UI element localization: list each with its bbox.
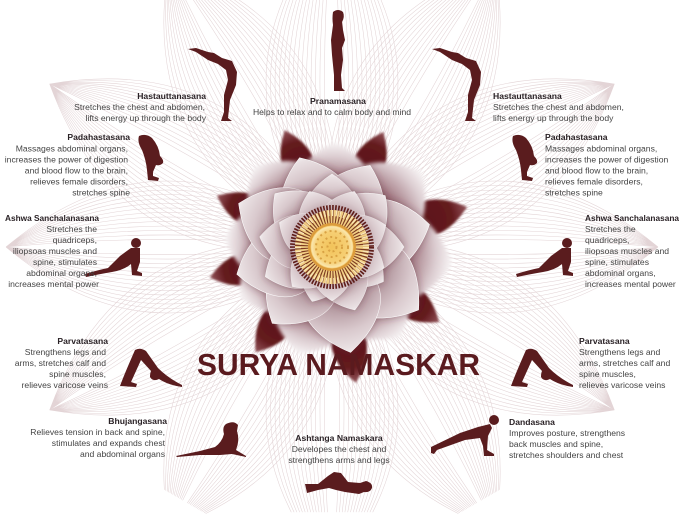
outer petals (220, 136, 458, 367)
text: Parvatasana left: relieves varicose veins (22, 380, 108, 390)
pose: Dandasana (431, 415, 499, 456)
text: Ashwa Sanchalanasana left: abdominal organs, (26, 268, 97, 278)
pose: Ashwa Sanchalanasana right (516, 238, 573, 277)
text: Ashtanga Namaskara: strengthens arms and legs (288, 455, 390, 465)
text: Ashwa Sanchalanasana right: Stretches the (585, 224, 636, 234)
text: Ashwa Sanchalanasana left (5, 213, 99, 289)
text: Padahastasana left: relieves female disorders, (30, 176, 128, 186)
lotus flower (206, 124, 472, 386)
text: Parvatasana left: Strengthens legs and (25, 347, 106, 357)
text: Padahastasana left: Padahastasana (67, 132, 130, 142)
text blocks (5, 91, 679, 465)
text: Padahastasana left: Massages abdominal organs, (16, 144, 128, 154)
text: Dandasana: stretches shoulders and chest (509, 450, 624, 460)
text: Parvatasana right: Parvatasana (579, 336, 630, 346)
text: Padahastasana right (545, 132, 668, 198)
pose: Hastauttanasana left (188, 48, 237, 121)
pose: Ashtanga Namaskara (305, 472, 372, 494)
text: Dandasana: Dandasana (509, 417, 555, 427)
text: Hastauttanasana right: Stretches the chest and abdomen, (493, 102, 624, 112)
text: Ashwa Sanchalanasana left: Ashwa Sanchalanasana (5, 213, 99, 223)
text: Parvatasana right: Strengthens legs and (579, 347, 660, 357)
yoga pose silhouettes (85, 10, 573, 494)
text: Padahastasana right: relieves female disorders, (545, 176, 643, 186)
text: Parvatasana left: spine muscles, (49, 369, 106, 379)
text: Parvatasana left: Parvatasana (57, 336, 108, 346)
text: Ashtanga Namaskara: Ashtanga Namaskara (295, 433, 383, 443)
text: Parvatasana right: relieves varicose veins (579, 380, 665, 390)
text: Parvatasana left (15, 336, 108, 390)
text: Ashtanga Namaskara (288, 433, 390, 465)
text: Ashwa Sanchalanasana right: spine, stimulates (585, 257, 649, 267)
text: Padahastasana left: and blood flow to the brain, (25, 166, 128, 176)
text: Parvatasana right: spine muscles, (579, 369, 636, 379)
text: Hastauttanasana right: lifts energy up through the body (493, 113, 614, 123)
text: Ashwa Sanchalanasana right: quadriceps, (585, 235, 629, 245)
text: Dandasana (509, 417, 625, 460)
text: Hastauttanasana left: lifts energy up through the body (86, 113, 207, 123)
text: Ashwa Sanchalanasana right: abdominal organs, (585, 268, 656, 278)
text: Parvatasana left: arms, stretches calf and (15, 358, 106, 368)
text: Ashwa Sanchalanasana left: Stretches the (46, 224, 97, 234)
text: Hastauttanasana left: Hastauttanasana (137, 91, 206, 101)
text: Pranamasana (253, 96, 411, 117)
text: Bhujangasana: Bhujangasana (108, 416, 167, 426)
text: Parvatasana right: arms, stretches calf and (579, 358, 670, 368)
inner petals (254, 173, 404, 318)
text: Bhujangasana: Relieves tension in back and spine, (30, 427, 165, 437)
text: Dandasana: Improves posture, strengthens (509, 428, 625, 438)
title: SURYA NAMASKAR (197, 347, 480, 382)
text: Ashtanga Namaskara: Developes the chest and (292, 444, 387, 454)
stamens and seed head (292, 208, 372, 286)
pose: Parvatasana right (511, 349, 573, 387)
text: Hastauttanasana right: Hastauttanasana (493, 91, 562, 101)
text: Ashwa Sanchalanasana left: quadriceps, (53, 235, 97, 245)
text: Pranamasana: Helps to relax and to calm body and mind (253, 107, 411, 117)
pose: Padahastasana right (512, 135, 537, 181)
text: Hastauttanasana left (74, 91, 207, 123)
pose: Pranamasana (331, 10, 345, 91)
text: Bhujangasana: stimulates and expands chest (52, 438, 166, 448)
text: Dandasana: back muscles and spine, (509, 439, 603, 449)
innermost petals (270, 183, 394, 301)
text: Padahastasana left: increases the power of digestion (5, 154, 128, 164)
pose: Parvatasana left (120, 349, 182, 387)
text: Padahastasana right: Padahastasana (545, 132, 608, 142)
pose: Padahastasana left (138, 135, 163, 181)
text: Bhujangasana (30, 416, 167, 459)
text: Padahastasana right: stretches spine (545, 188, 603, 198)
middle petals (223, 146, 442, 359)
text: Ashwa Sanchalanasana left: increases mental power (8, 279, 99, 289)
text: Ashwa Sanchalanasana right: increases mental power (585, 279, 676, 289)
pose: Hastauttanasana right (432, 48, 481, 121)
pose: Ashwa Sanchalanasana left (85, 238, 142, 277)
text: Ashwa Sanchalanasana left: spine, stimulates (33, 257, 97, 267)
text: Parvatasana right (579, 336, 670, 390)
text: Padahastasana right: and blood flow to the brain, (545, 166, 648, 176)
text: Hastauttanasana left: Stretches the chest and abdomen, (74, 102, 205, 112)
text: Hastauttanasana right (493, 91, 624, 123)
text: Bhujangasana: and abdominal organs (80, 449, 165, 459)
text: Ashwa Sanchalanasana right: iliopsoas muscles and (585, 246, 669, 256)
text: Padahastasana left (5, 132, 130, 198)
dark sepals (206, 124, 472, 386)
text: Ashwa Sanchalanasana right (585, 213, 679, 289)
pose: Bhujangasana (176, 422, 246, 457)
text: Ashwa Sanchalanasana left: iliopsoas muscles and (13, 246, 97, 256)
text: Padahastasana left: stretches spine (72, 188, 130, 198)
text: Padahastasana right: Massages abdominal organs, (545, 144, 657, 154)
text: Pranamasana: Pranamasana (310, 96, 366, 106)
text: Padahastasana right: increases the power of digestion (545, 154, 668, 164)
